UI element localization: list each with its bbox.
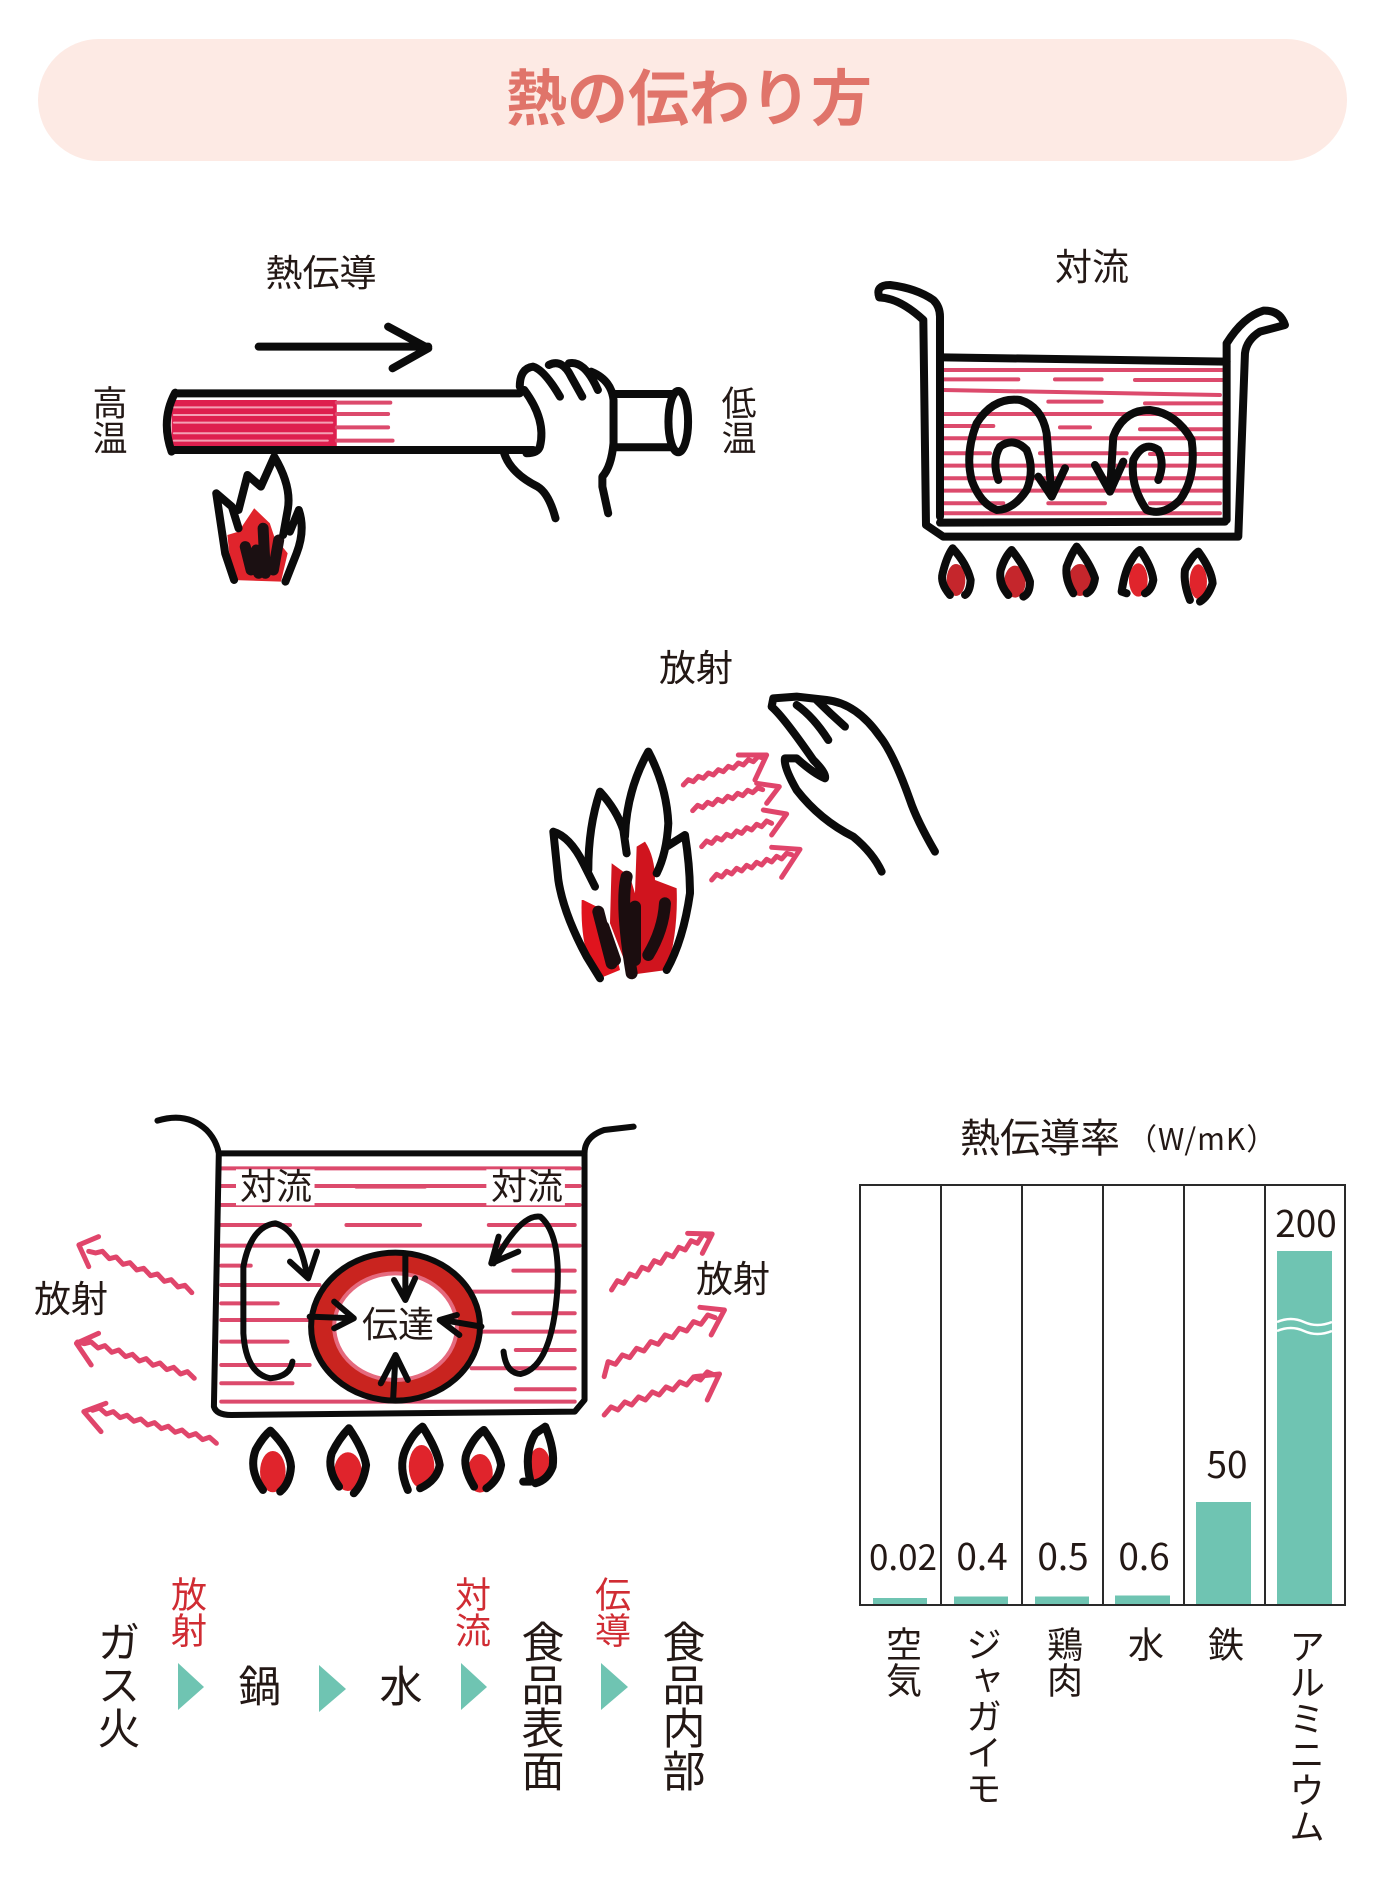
step: food interior: 食品内部 — [653, 1620, 715, 1792]
illustration: pipe, hand and flame — [167, 363, 688, 582]
arrow: step 3 — [461, 1663, 487, 1710]
value: potato: 0.4 — [956, 1527, 1008, 1581]
value: aluminium: 200 — [1275, 1194, 1337, 1248]
bar: aluminium — [1277, 1251, 1332, 1604]
illustration: flame, heat waves and hand — [553, 697, 935, 978]
value: water: 0.6 — [1118, 1527, 1170, 1581]
label: aluminium: アルミニウム — [1281, 1628, 1333, 1844]
step: pot: 鍋 — [229, 1664, 291, 1707]
panel: cooking heat transfer — [34, 1118, 770, 1493]
label: convection step: 対流 — [447, 1576, 499, 1648]
label: convection right: 対流 — [491, 1158, 563, 1210]
label: air: 空気 — [878, 1626, 930, 1698]
label: low temperature: 低温 — [714, 385, 764, 455]
label: water: 水 — [1120, 1626, 1172, 1662]
heading: convection: 対流 — [1055, 237, 1129, 291]
heading: radiation: 放射 — [659, 638, 733, 692]
label: radiation step: 放射 — [163, 1576, 215, 1648]
bar: chicken — [1035, 1596, 1089, 1604]
value: iron: 50 — [1206, 1435, 1248, 1489]
label: chicken: 鶏肉 — [1039, 1626, 1091, 1698]
title banner — [38, 39, 1347, 161]
chart title: 熱伝導率 — [960, 1106, 1120, 1164]
heading: conduction: 熱伝導 — [266, 243, 376, 297]
title: 熱の伝わり方 — [506, 49, 872, 138]
value: air: 0.02 — [869, 1530, 937, 1581]
label: conduction into food: 伝達 — [362, 1296, 434, 1348]
panel: thermal conductivity chart — [860, 1106, 1345, 1844]
label: potato: ジャガイモ — [958, 1626, 1010, 1806]
panel: heat path flow — [88, 1576, 715, 1792]
arrow: step 2 — [319, 1665, 346, 1712]
bar: air — [873, 1598, 927, 1604]
illustration: pot with food, convection and burner flames — [76, 1118, 724, 1493]
label: radiation left: 放射 — [34, 1269, 108, 1323]
bar: water — [1115, 1596, 1170, 1604]
label: high temperature: 高温 — [84, 385, 136, 455]
step: gas flame: ガス火 — [88, 1620, 150, 1749]
label: convection left: 対流 — [240, 1158, 312, 1210]
panel: heat conduction — [84, 243, 764, 582]
step: water: 水 — [370, 1664, 432, 1707]
panel: convection — [878, 237, 1285, 602]
arrow: step 1 — [178, 1663, 204, 1710]
bar: potato — [954, 1596, 1008, 1604]
chart frame — [860, 1185, 1345, 1605]
arrow: step 4 — [601, 1663, 628, 1710]
value: chicken: 0.5 — [1037, 1527, 1089, 1581]
label: conduction step: 伝導 — [587, 1576, 639, 1648]
chart unit: （W/mK） — [1127, 1115, 1277, 1159]
step: food surface: 食品表面 — [512, 1620, 574, 1792]
label: radiation right: 放射 — [696, 1249, 770, 1303]
bar: iron — [1196, 1502, 1251, 1604]
panel: radiation — [553, 638, 935, 978]
arrow: heat direction — [259, 327, 428, 368]
illustration: pot with convection swirls and burner flames — [878, 285, 1285, 602]
label: iron: 鉄 — [1200, 1626, 1252, 1662]
